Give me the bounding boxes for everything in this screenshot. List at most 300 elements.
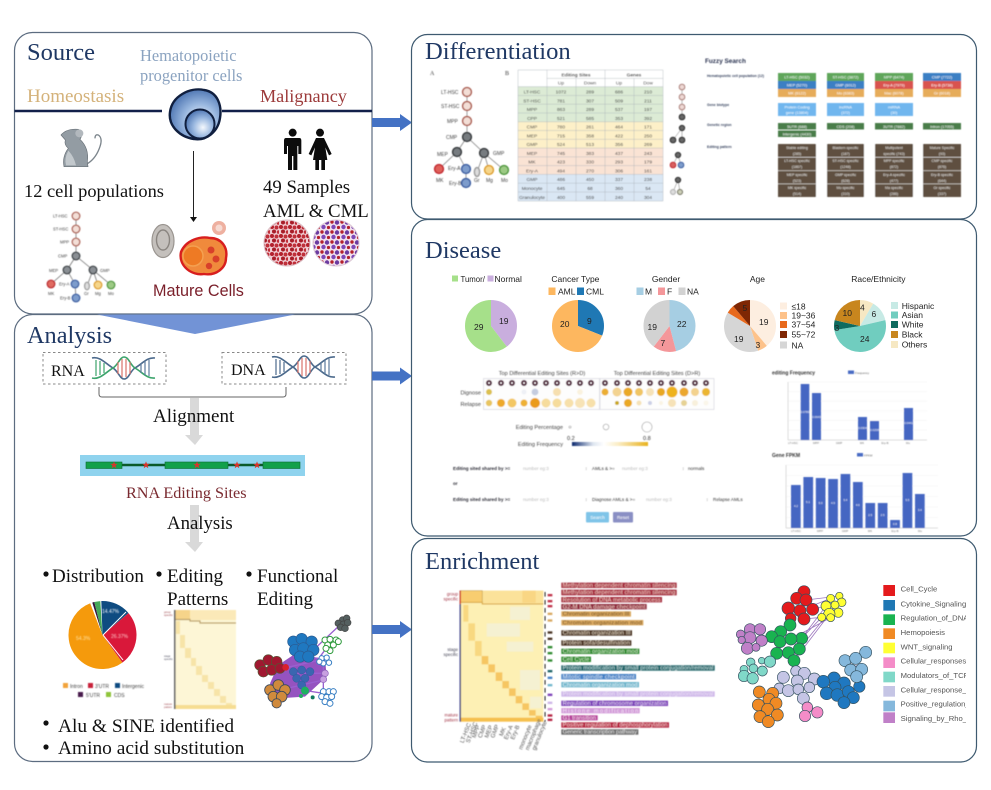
table: differential editing: 509 (615, 98, 623, 104)
bar chart: editing frequency: Frequency (855, 371, 870, 375)
table: differential editing: 68 (587, 186, 593, 192)
icon: mouse (61, 129, 101, 167)
pie chart: genomic distribution: 26.37% (111, 634, 129, 640)
diagram: cell hierarchy small: LT-HSC (53, 214, 68, 218)
table: differential editing: 330 (586, 160, 594, 166)
heading: analysis: Analysis (27, 322, 112, 349)
table: differential editing: 524 (557, 142, 565, 148)
filter chips: cell population: MK (6122) (788, 92, 807, 96)
diagram: cell hierarchy small: Mg (95, 291, 101, 296)
heatmap: enrichment: pattern (445, 718, 459, 723)
filter chips: editing pattern: Multipotent (885, 146, 903, 150)
heatmap: enrichment: group (447, 591, 459, 596)
bubble chart: top differential editing sites: Top Differential Editing Sites (D>R) (614, 371, 700, 377)
table: differential editing: 211 (644, 98, 652, 104)
heatmap: enrichment: specific (444, 597, 459, 602)
filter chips: editing pattern: Blastem specific (833, 146, 859, 150)
filter chips: editing pattern: (628) (841, 179, 850, 183)
legend: enrichment clusters: WNT_signaling (901, 642, 953, 651)
bubble chart: top differential editing sites (460, 371, 714, 448)
pie chart: tumor vs normal: 19 (499, 316, 509, 326)
legend: enrichment clusters: Hemopoiesis (901, 628, 945, 637)
table: differential editing: Down (584, 80, 596, 86)
filter chips: editing pattern: Stable editing (786, 146, 808, 150)
panel: differentiation (412, 34, 976, 219)
arrow: to differentiation (372, 114, 412, 131)
heatmap: enrichment: MK (499, 727, 508, 737)
filter chips: cell population: GMP (6012) (835, 84, 857, 88)
heading: source: Source (27, 39, 95, 66)
filter chips: cell population: CMP (7722) (932, 76, 953, 80)
legend: editing percentage and frequency: 0.2 (567, 436, 575, 442)
filter chips: cell population: MEP (5270) (787, 84, 808, 88)
table: differential editing: GMP (527, 177, 537, 183)
bar chart: gene FPKM: 5.0 (819, 501, 823, 505)
form: editing site filters: normals (688, 466, 705, 471)
network: enrichment clusters (736, 586, 872, 728)
form: editing site filters: Diagnose AMLs & >= (592, 497, 635, 502)
diagram: cell hierarchy small: Gr (84, 291, 89, 296)
table: differential editing: 513 (586, 142, 594, 148)
diagram: differentiation hierarchy (430, 71, 509, 187)
diagram: differentiation hierarchy: B (505, 71, 509, 77)
table: differential editing: MEP (527, 151, 537, 157)
table: differential editing: 422 (615, 133, 623, 139)
legend: enrichment clusters: Cell_Cycle (901, 585, 937, 594)
diagram: cell hierarchy small (47, 212, 115, 302)
pie chart: cancer type: CML (586, 287, 604, 297)
table: differential editing: 494 (557, 168, 565, 174)
filter chips: cell population (778, 73, 961, 97)
pie chart: genomic distribution: 3'UTR (95, 684, 109, 690)
button: search (586, 512, 609, 522)
table: differential editing: 781 (557, 98, 565, 104)
diagram: differentiation hierarchy: GMP (493, 151, 505, 157)
table: differential editing: 307 (586, 98, 594, 104)
table: differential editing: 261 (586, 125, 594, 131)
enrichment terms list: Chromatin organization III (563, 612, 630, 618)
table: differential editing: 559 (586, 195, 594, 201)
heatmap: enrichment: GMP (490, 724, 501, 739)
table: differential editing (518, 70, 663, 201)
bar chart: editing frequency: 0.0643 (812, 415, 821, 419)
bullet: editing patterns: Patterns (167, 589, 228, 610)
table: differential editing: 270 (586, 168, 594, 174)
table: differential editing: 337 (615, 177, 623, 183)
label: DNA: DNA (231, 362, 266, 379)
filter chips: genetic region: Intergenic (4430) (783, 132, 812, 136)
heatmap: enrichment: MEP (484, 725, 495, 739)
bar chart: gene FPKM: Gene FPKM (772, 453, 800, 459)
pie chart: genomic distribution: 5'UTR (86, 693, 100, 699)
legend: editing percentage and frequency: Editing Percentage (516, 425, 563, 431)
bar chart: gene FPKM: 4.6 (856, 503, 860, 507)
pie chart: age: NA (792, 340, 804, 350)
heatmap: enrichment: monocyte (518, 724, 534, 751)
table: differential editing: 360 (615, 186, 623, 192)
filter chips: cell population: Gr (6018) (934, 92, 951, 96)
table: differential editing: Up (558, 80, 564, 86)
form: editing site filters: Editing sited shared by >= (453, 497, 510, 502)
heatmap: enrichment: stage (447, 647, 459, 652)
filter chips: genetic region: 5UTR (688) (787, 125, 808, 129)
pie chart: cancer type (548, 274, 604, 339)
table: differential editing: 179 (644, 160, 652, 166)
enrichment terms list: Generic transcription pathway (563, 730, 637, 736)
diagram: differentiation hierarchy: A (430, 71, 435, 77)
arrow: analysis (185, 505, 203, 552)
diagram: cell hierarchy small: MPP (60, 240, 69, 244)
table: differential editing: 353 (615, 116, 623, 122)
pie chart: race and ethnicity (834, 274, 935, 350)
enrichment terms list: Regulation of chromosome organization (563, 701, 667, 707)
legend: editing percentage and frequency: 0.8 (643, 436, 651, 442)
pie chart: gender: M (645, 287, 652, 297)
heading: differentiation: Differentiation (425, 38, 571, 65)
enrichment terms list: Chromatin organization mod (563, 682, 638, 688)
table: differential editing: 289 (586, 107, 594, 113)
filter chips: cell population: Ery-A (7979) (883, 84, 905, 88)
filter chips: cell population: ST-HSC (3872) (833, 76, 859, 80)
enrichment terms list (561, 583, 715, 736)
bar chart: editing frequency: LT-HSC (788, 441, 798, 445)
table: differential editing: 450 (586, 177, 594, 183)
pie chart: age: 19 (734, 334, 744, 344)
bar chart: editing frequency: MPP (813, 441, 819, 445)
enrichment terms list: Positive regulation of dephosphorylation (563, 723, 668, 729)
filter chips: editing pattern: Gr specific (934, 186, 951, 190)
filter chips: editing pattern: ST-HSC specific (832, 159, 859, 163)
bar chart: gene FPKM (772, 453, 938, 533)
filter chips: editing pattern: (93) (939, 152, 945, 156)
table: differential editing: Editing Sites (561, 72, 591, 78)
filter chips: cell population: Mo (6383) (837, 92, 855, 96)
filter chips: editing pattern: GMP specific (835, 173, 856, 177)
bullet: functional editing: Editing (257, 589, 313, 610)
bullet: functional editing (246, 566, 338, 610)
pie chart: race and ethnicity: Others (902, 340, 927, 350)
filter chips: genetic region: 3UTR (7882) (883, 125, 906, 129)
filter chips: genetic region: CDS (208) (837, 125, 855, 129)
bubble chart: top differential editing sites: Top Differential Editing Sites (R>D) (499, 371, 585, 377)
label: RNA: RNA (51, 363, 85, 380)
enrichment terms list: Chromatin organization mod (563, 649, 638, 655)
filter chips: editing pattern: (286) (890, 192, 898, 196)
table: differential editing: 358 (586, 133, 594, 139)
table: differential editing: 1072 (556, 90, 567, 96)
diagram: differentiation hierarchy: Mo (501, 178, 508, 184)
filter chips: editing pattern: LT-HSC specific (784, 159, 810, 163)
table: differential editing: 392 (644, 116, 652, 122)
diagram: cell hierarchy small: Ery-B (60, 296, 71, 300)
text: alignment: Alignment (153, 406, 235, 427)
legend: enrichment clusters: Cellular_response_ (901, 685, 967, 694)
filter chips: editing pattern: (876) (938, 165, 946, 169)
filter chips: editing pattern: (477) (890, 179, 898, 183)
network: functional editing (255, 615, 351, 708)
table: differential editing: GMP (527, 142, 537, 148)
panel: fuzzy search: Genetic region (707, 123, 732, 127)
heatmap: enrichment: mature (445, 713, 459, 718)
heading: disease: Disease (425, 237, 501, 264)
legend: enrichment clusters: Cytokine_Signaling (901, 599, 966, 608)
pie chart: gender: NA (687, 287, 699, 297)
enrichment terms list: Methylation dependent chromatin silencing (563, 583, 675, 589)
heading: enrichment: Enrichment (425, 548, 539, 575)
bullet list: findings: Amino acid substitution (58, 738, 245, 759)
text: 12 cell populations: 12 cell populations (24, 181, 164, 201)
panel: fuzzy search: Gene biotype (707, 103, 729, 107)
pie chart: race and ethnicity: 6 (872, 309, 876, 319)
table: differential editing: 423 (557, 160, 565, 166)
text: 49 samples: AML & CML (263, 201, 369, 222)
heatmap: enrichment: granulocyte (532, 720, 549, 751)
label: RNA editing sites: RNA Editing Sites (126, 484, 247, 502)
pie chart: race and ethnicity: 4 (860, 302, 865, 312)
pie chart: cancer type: AML (558, 287, 576, 297)
form: editing site filters: number eg:3 (523, 466, 549, 471)
pie chart: genomic distribution: 54.3% (76, 636, 91, 642)
enrichment terms list: G2-M DNA damage checkpoint (563, 604, 646, 610)
filter chips: editing pattern: specific (743) (883, 152, 905, 156)
bar chart: editing frequency: editing Frequency (772, 370, 815, 376)
bar chart: gene FPKM: FPKM (864, 454, 873, 458)
table: differential editing: 686 (615, 90, 623, 96)
label: malignancy: Malignancy (260, 86, 348, 106)
pie chart: race and ethnicity: Black (902, 330, 923, 340)
table: differential editing: 745 (557, 151, 565, 157)
heatmap: enrichment: CMP (478, 724, 488, 739)
bar chart: gene FPKM: Mo (918, 529, 922, 533)
bar chart: editing frequency: Mo (906, 441, 910, 445)
bar chart: editing frequency: 0.0304 (858, 426, 867, 430)
bar chart: gene FPKM: 5.5 (905, 498, 910, 502)
filter chips: cell population: LT-HSC (5032) (784, 76, 810, 80)
pie chart: race and ethnicity: 3 (834, 323, 840, 333)
heatmap: editing patterns: specific (164, 613, 173, 617)
bar chart: gene FPKM: Ery-B (892, 529, 899, 533)
pie chart: race and ethnicity: 10 (842, 308, 852, 318)
table: differential editing: 645 (557, 186, 565, 192)
filter chips: editing pattern: (872) (890, 165, 898, 169)
diagram: differentiation hierarchy: ST-HSC (441, 104, 460, 110)
enrichment terms list: Methylation dependent chromatin silencing (563, 590, 675, 596)
table: differential editing: 269 (644, 142, 652, 148)
table: differential editing: 715 (557, 133, 565, 139)
pie chart: age: Age (750, 274, 765, 284)
table: differential editing: 238 (644, 177, 652, 183)
table: differential editing: 863 (557, 107, 565, 113)
table: differential editing: 437 (615, 151, 623, 157)
filter chips: gene biotype: Protein Coding (784, 106, 810, 110)
icon: DNA helix (272, 356, 335, 378)
filter chips: gene biotype: miRNA (888, 106, 900, 110)
heading: hematopoietic progenitor cells: Hematopoietic (140, 46, 236, 65)
bar chart: editing frequency: Ery-B (882, 441, 889, 445)
form: editing site filters: ↕ (682, 466, 684, 471)
bar chart: gene FPKM: 0.8 (893, 522, 897, 526)
enrichment terms list: Cell Cycle (563, 657, 589, 663)
diagram: cell hierarchy small: ST-HSC (53, 226, 68, 232)
filter chips: editing pattern: MPP specific (884, 159, 905, 163)
arrow: alignment (185, 398, 203, 445)
panel: disease (412, 220, 976, 536)
enrichment terms list: Chromatin organization mod (563, 620, 642, 626)
table: differential editing: 780 (557, 125, 565, 131)
legend: enrichment clusters: Modulators_of_TCF (901, 671, 969, 680)
pie chart: cancer type: 20 (560, 319, 570, 329)
filter chips: editing pattern: (523) (793, 179, 801, 183)
divider lines (14, 110, 372, 112)
panel: enrichment (412, 538, 976, 762)
pie chart: tumor vs normal: Normal (494, 274, 522, 284)
form: editing site filters: ↕ (585, 466, 587, 471)
bar chart: gene FPKM: GMP (842, 529, 848, 533)
bar chart: gene FPKM: 5.4 (843, 498, 848, 502)
table: differential editing: Genes (627, 72, 642, 78)
form: editing site filters (453, 466, 743, 522)
table: differential editing: MEP (527, 133, 537, 139)
pie chart: age: 19 (759, 317, 769, 327)
table: differential editing: MPP (527, 107, 537, 113)
bar chart: gene FPKM: MPP (817, 529, 823, 533)
enrichment terms list: Protein modification by small protein conjugation/removal (563, 692, 713, 698)
filter chips: editing pattern (778, 140, 961, 200)
pie chart: race and ethnicity: 24 (860, 334, 870, 344)
diagram: differentiation hierarchy: LT-HSC (441, 90, 459, 96)
panel: analysis (14, 314, 372, 762)
table: differential editing: 306 (615, 168, 623, 174)
filter chips: editing pattern: (1867) (792, 165, 802, 169)
pie chart: cancer type: Cancer Type (551, 274, 600, 284)
table: differential editing: 250 (644, 133, 652, 139)
pie chart: age: 3 (756, 340, 760, 350)
label: homeostasis: Homeostasis (27, 86, 124, 107)
form: editing site filters: number eg:3 (646, 497, 672, 502)
filter chips: gene biotype: (372) (841, 111, 851, 115)
table: differential editing: 197 (644, 107, 652, 113)
form: editing site filters: ↕ (585, 497, 587, 502)
enrichment terms list: Protein sofa/desulfination (563, 641, 630, 647)
filter chips: editing pattern: (644) (938, 179, 946, 183)
bar chart: editing frequency: MK (860, 441, 864, 445)
diagram: differentiation hierarchy: Gr (474, 178, 480, 184)
pie chart: race and ethnicity: Race/Ethnicity (851, 274, 906, 284)
pie chart: age: ≤18 (792, 301, 806, 311)
text: 49 samples: 49 Samples (263, 177, 350, 198)
pie chart: tumor vs normal: Tumor/ (460, 275, 486, 284)
table: differential editing: 537 (615, 107, 623, 113)
illustration: blood smears (264, 220, 359, 266)
table: differential editing: 400 (557, 195, 565, 201)
heading: hematopoietic progenitor cells: progenitor cells (140, 66, 242, 85)
pie chart: genomic distribution: 14.47% (102, 609, 120, 615)
table: differential editing: 585 (586, 116, 594, 122)
legend: editing percentage and frequency (516, 422, 652, 448)
legend: enrichment clusters (883, 585, 966, 723)
button: reset: Reset (617, 515, 630, 520)
table: differential editing: CPP (527, 116, 537, 122)
heatmap: enrichment: Ery-B (510, 725, 521, 741)
table: differential editing: CMP (527, 125, 537, 131)
bullet list: findings: Alu & SINE identified (58, 716, 234, 737)
legend: enrichment clusters: Cellular_responses_ (901, 657, 971, 666)
filter chips: gene biotype: lncRNA (839, 106, 852, 110)
form: editing site filters: number eg:3 (523, 497, 549, 502)
table: differential editing: 304 (644, 195, 652, 201)
table: differential editing: Monocyte (522, 186, 543, 192)
heading: fuzzy search: Fuzzy Search (705, 58, 746, 65)
bar chart: gene FPKM: LT-HSC (791, 529, 801, 533)
diagram: differentiation hierarchy: MPP (447, 119, 458, 125)
icon: RNA helix (92, 357, 155, 379)
heatmap: enrichment: ST-HSC (466, 721, 480, 744)
table: differential editing: 289 (586, 90, 594, 96)
heatmap: editing patterns: specific (164, 657, 173, 661)
panel: fuzzy search: Editing pattern (707, 145, 732, 149)
table: differential editing: Granulocyte (519, 195, 545, 201)
diagram: differentiation hierarchy: Ery-A (448, 166, 461, 172)
diagram: differentiation hierarchy: CMP (446, 135, 458, 141)
bubble chart: top differential editing sites: Relapse (460, 402, 481, 408)
table: differential editing: MK (528, 160, 536, 166)
form: editing site filters: number eg:3 (622, 466, 648, 471)
diagram: differentiation hierarchy: Ery-B (449, 181, 462, 187)
bullet: distribution: Distribution (52, 566, 144, 587)
bullet: editing patterns (156, 566, 228, 610)
bar chart: gene FPKM: 4.2 (794, 504, 798, 508)
panel: fuzzy search: Hematopoietic cell population (12) (707, 74, 764, 78)
bullet: editing patterns: Editing (167, 566, 223, 587)
pie chart: race and ethnicity: Asian (902, 310, 923, 320)
diagram: cell hierarchy small: MEP (49, 268, 58, 273)
filter chips: editing pattern: (310) (841, 192, 850, 196)
bar chart: gene FPKM: 3.4 (918, 508, 922, 512)
button: search: Search (590, 515, 605, 520)
filter chips: editing pattern: Mature Specific (930, 146, 955, 150)
pie chart: gender: 19 (648, 322, 657, 332)
button: reset (613, 512, 633, 522)
panel: fuzzy search (705, 58, 961, 200)
table: differential editing: 464 (615, 125, 623, 131)
pie chart: tumor vs normal (452, 274, 522, 339)
bar chart: gene FPKM: 2.5 (881, 513, 885, 517)
table: differential editing: Up (616, 80, 622, 86)
filter chips: cell population: Ery-B (5738) (931, 84, 953, 88)
enrichment terms list: Histone modification (563, 708, 638, 714)
arrow: to enrichment (372, 621, 412, 638)
pie chart: race and ethnicity: Hispanic (902, 301, 935, 311)
bar chart: editing frequency (772, 370, 927, 445)
diagram: cell hierarchy small: Mo (108, 291, 114, 296)
pie chart: age: 19~36 (792, 311, 816, 321)
legend: editing percentage and frequency: Editing Frequency (518, 442, 563, 448)
enrichment terms list: G1 transition (563, 715, 596, 721)
table: differential editing: 486 (557, 177, 565, 183)
form: editing site filters: or (453, 481, 458, 486)
diagram: differentiation hierarchy: Mg (486, 178, 493, 184)
bar chart: editing frequency: 0.0441 (904, 421, 913, 425)
icon: progenitor cell (170, 89, 220, 139)
heatmap: enrichment: MPP (472, 725, 482, 739)
heatmap: enrichment: Ery-A (504, 725, 515, 741)
table: differential editing: Ery-A (526, 168, 539, 174)
legend: enrichment clusters: Regulation_of_DNA (901, 614, 969, 623)
form: editing site filters: Editing sited shared by >= (453, 466, 510, 471)
heatmap: editing patterns: mature (164, 702, 173, 706)
pie chart: cancer type: 9 (587, 316, 592, 326)
pie chart: age: 37~54 (792, 320, 816, 330)
